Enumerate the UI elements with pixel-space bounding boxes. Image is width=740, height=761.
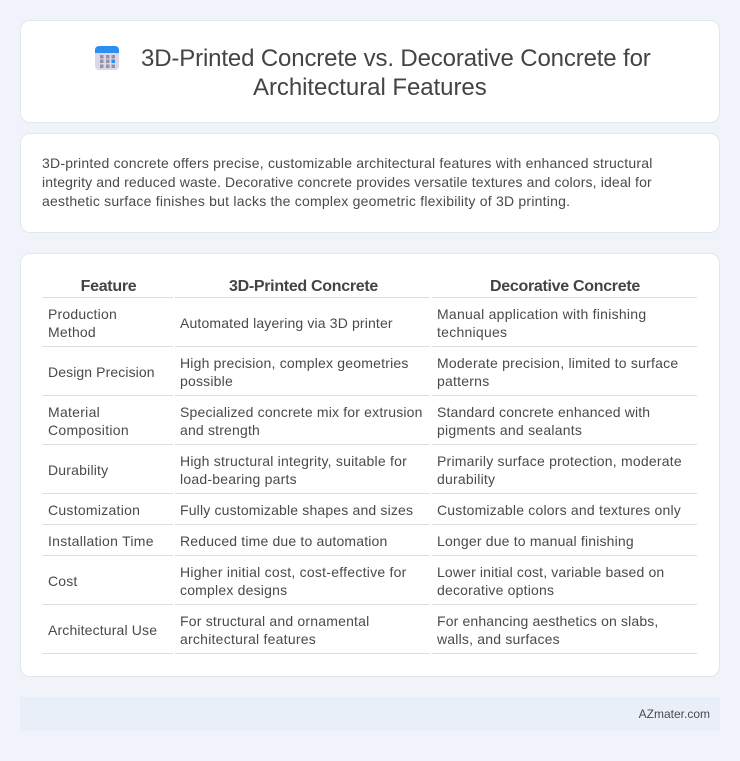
title: Architectural Features <box>253 74 487 101</box>
header row: Feature <box>81 278 136 295</box>
row: design precision <box>48 355 678 389</box>
row: installation time: Installation Time <box>48 533 154 549</box>
row: architectural use: For enhancing aesthetics on slabs, <box>437 613 658 629</box>
row: architectural use: architectural features <box>180 631 316 647</box>
icon: calendar <box>95 46 119 70</box>
row: cost: Lower initial cost, variable based on <box>437 564 664 580</box>
row: cost: Higher initial cost, cost-effective for <box>180 564 407 580</box>
row: durability: load-bearing parts <box>180 471 297 487</box>
row: material composition: Composition <box>48 422 129 438</box>
row: material composition <box>48 404 650 438</box>
row: material composition: Material <box>48 404 100 420</box>
table <box>42 278 697 654</box>
header row: 3D-Printed Concrete <box>229 278 378 295</box>
row: durability: Primarily surface protection, moderate <box>437 453 682 469</box>
summary text: 3D-printed concrete offers precise, customizable architectural features with enhanced structural <box>42 155 653 171</box>
row: cost: Cost <box>48 573 77 589</box>
row: material composition: pigments and sealants <box>437 422 582 438</box>
row: architectural use: For structural and ornamental <box>180 613 369 629</box>
title: 3D-Printed Concrete vs. Decorative Concrete for <box>141 45 651 72</box>
row: production method: techniques <box>437 324 507 340</box>
panel: summary <box>20 133 720 233</box>
row: architectural use: Architectural Use <box>48 622 157 638</box>
row: material composition: Specialized concrete mix for extrusion <box>180 404 423 420</box>
row: customization: Fully customizable shapes and sizes <box>180 502 413 518</box>
row: installation time <box>48 533 634 549</box>
row: production method: Manual application with finishing <box>437 306 646 322</box>
row: design precision: possible <box>180 373 233 389</box>
row: customization: Customization <box>48 502 140 518</box>
summary text: aesthetic surface finishes but lacks the complex geometric flexibility of 3D printing. <box>42 193 570 209</box>
row: production method: Production <box>48 306 117 322</box>
row: customization <box>48 502 681 518</box>
row: cost <box>48 564 664 598</box>
row: cost: decorative options <box>437 582 554 598</box>
footer credit: AZmater.com <box>639 707 710 721</box>
row: design precision: Moderate precision, limited to surface <box>437 355 678 371</box>
summary text <box>42 155 653 209</box>
row: design precision: patterns <box>437 373 489 389</box>
row: cost: complex designs <box>180 582 287 598</box>
summary text: integrity and reduced waste. Decorative concrete provides versatile textures and colors, ideal for <box>42 174 652 190</box>
title <box>141 45 651 101</box>
row: production method: Method <box>48 324 96 340</box>
row: installation time: Reduced time due to automation <box>180 533 387 549</box>
row: material composition: Standard concrete enhanced with <box>437 404 650 420</box>
row: design precision: Design Precision <box>48 364 155 380</box>
row: installation time: Longer due to manual finishing <box>437 533 634 549</box>
row: durability: Durability <box>48 462 108 478</box>
panel: title card <box>20 20 720 123</box>
row: durability <box>48 453 682 487</box>
panel: comparison table <box>20 253 720 677</box>
row: durability: High structural integrity, suitable for <box>180 453 407 469</box>
row: production method <box>48 306 646 340</box>
header row <box>81 278 640 295</box>
row: production method: Automated layering via 3D printer <box>180 315 393 331</box>
row: design precision: High precision, complex geometries <box>180 355 409 371</box>
row: durability: durability <box>437 471 495 487</box>
row: architectural use <box>48 613 658 647</box>
row: architectural use: walls, and surfaces <box>437 631 560 647</box>
header row: Decorative Concrete <box>490 278 640 295</box>
row: customization: Customizable colors and textures only <box>437 502 681 518</box>
footer bar <box>20 697 720 731</box>
row: material composition: and strength <box>180 422 260 438</box>
